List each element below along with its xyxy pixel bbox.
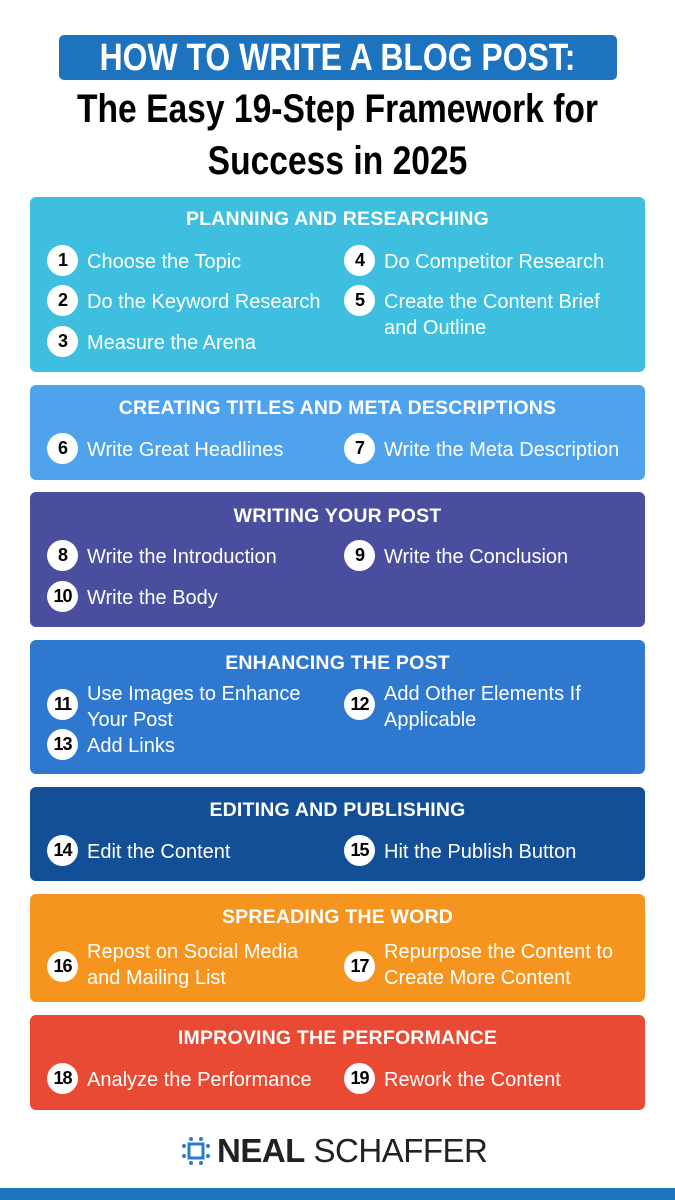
step 14 — [47, 835, 230, 866]
panel: writing your post: 9 — [355, 545, 364, 565]
step 10 — [47, 581, 218, 612]
panel: editing and publishing: Hit the Publish Button — [384, 841, 576, 863]
step 6 — [47, 433, 283, 464]
heading: PLANNING AND RESEARCHING — [186, 208, 489, 230]
panel: enhancing the post: Your Post — [87, 709, 173, 731]
step 19 — [344, 1063, 561, 1094]
panel: planning and researching: 4 — [355, 250, 364, 270]
step 5 — [344, 285, 600, 339]
heading: WRITING YOUR POST — [234, 505, 441, 527]
panel: spreading the word: Repurpose the Content to — [384, 941, 613, 963]
panel: planning and researching: and Outline — [384, 317, 486, 339]
panel: improving the performance: Analyze the Performance — [87, 1069, 312, 1091]
step 3 — [47, 326, 256, 357]
panel: enhancing the post — [30, 640, 645, 774]
logo text: NEAL SCHAFFER — [217, 1132, 487, 1169]
panel: planning and researching: 5 — [355, 290, 364, 310]
panel: planning and researching: Measure the Arena — [87, 332, 256, 354]
panel: writing your post — [30, 492, 645, 627]
panel: enhancing the post: Applicable — [384, 709, 476, 731]
panel: titles and meta: 7 — [355, 438, 364, 458]
panel: spreading the word: and Mailing List — [87, 967, 226, 989]
bottom bar — [0, 1188, 675, 1200]
heading: SPREADING THE WORD — [222, 906, 453, 928]
heading: CREATING TITLES AND META DESCRIPTIONS — [119, 397, 556, 419]
icon: logo mark — [182, 1137, 210, 1165]
step 8 — [47, 540, 277, 571]
panel: planning and researching: Do the Keyword Research — [87, 291, 320, 313]
panel: improving the performance: 18 — [53, 1068, 72, 1088]
logo: Neal Schaffer — [182, 1132, 487, 1169]
panel: enhancing the post: 13 — [53, 734, 72, 754]
panel: writing your post: Write the Introduction — [87, 546, 277, 568]
panel: editing and publishing — [30, 787, 645, 881]
panel: titles and meta: Write the Meta Description — [384, 439, 619, 461]
panel: writing your post: 10 — [53, 586, 72, 606]
step 4 — [344, 245, 604, 276]
step 9 — [344, 540, 568, 571]
step 2 — [47, 285, 320, 316]
title line 3: Success in 2025 — [208, 139, 467, 183]
panel: planning and researching: 3 — [58, 331, 67, 351]
panel: spreading the word — [30, 894, 645, 1002]
step 13 — [47, 729, 175, 760]
panel: titles and meta: Write Great Headlines — [87, 439, 283, 461]
panel: writing your post: 8 — [58, 545, 67, 565]
panel: enhancing the post: 11 — [54, 694, 71, 714]
panel: spreading the word: 17 — [350, 956, 369, 976]
panel: improving the performance — [30, 1015, 645, 1110]
panel: titles and meta — [30, 385, 645, 480]
panel: enhancing the post: Add Links — [87, 735, 175, 757]
panel: improving the performance: 19 — [350, 1068, 369, 1088]
step 7 — [344, 433, 619, 464]
panel: writing your post: Write the Conclusion — [384, 546, 568, 568]
panel: writing your post: Write the Body — [87, 587, 218, 609]
panel: planning and researching: Choose the Topic — [87, 251, 241, 273]
panel: enhancing the post: Add Other Elements If — [384, 683, 581, 705]
step 1 — [47, 245, 241, 276]
panel: planning and researching: Create the Content Brief — [384, 291, 600, 313]
panel: planning and researching: Do Competitor Research — [384, 251, 604, 273]
panel: spreading the word: Create More Content — [384, 967, 571, 989]
title line 1: HOW TO WRITE A BLOG POST: — [100, 37, 575, 79]
panel: spreading the word: Repost on Social Media — [87, 941, 298, 963]
panel: planning and researching: 1 — [58, 250, 67, 270]
step 11 — [47, 683, 300, 731]
title line 2: The Easy 19-Step Framework for — [77, 87, 598, 131]
step 17 — [344, 941, 613, 989]
panel: improving the performance: Rework the Content — [384, 1069, 561, 1091]
step 18 — [47, 1063, 312, 1094]
heading: IMPROVING THE PERFORMANCE — [178, 1027, 497, 1049]
panel: editing and publishing: 14 — [53, 840, 72, 860]
heading: EDITING AND PUBLISHING — [209, 799, 466, 821]
panel: planning and researching: 2 — [58, 290, 67, 310]
panel: spreading the word: 16 — [53, 956, 72, 976]
title badge — [59, 35, 617, 80]
step 12 — [344, 683, 581, 731]
step 16 — [47, 941, 298, 989]
panel: titles and meta: 6 — [58, 438, 67, 458]
panel: enhancing the post: 12 — [350, 694, 369, 714]
panel: editing and publishing: Edit the Content — [87, 841, 230, 863]
heading: ENHANCING THE POST — [225, 652, 450, 674]
panel: editing and publishing: 15 — [350, 840, 369, 860]
panel: planning and researching — [30, 197, 645, 372]
panel: enhancing the post: Use Images to Enhance — [87, 683, 300, 705]
step 15 — [344, 835, 576, 866]
